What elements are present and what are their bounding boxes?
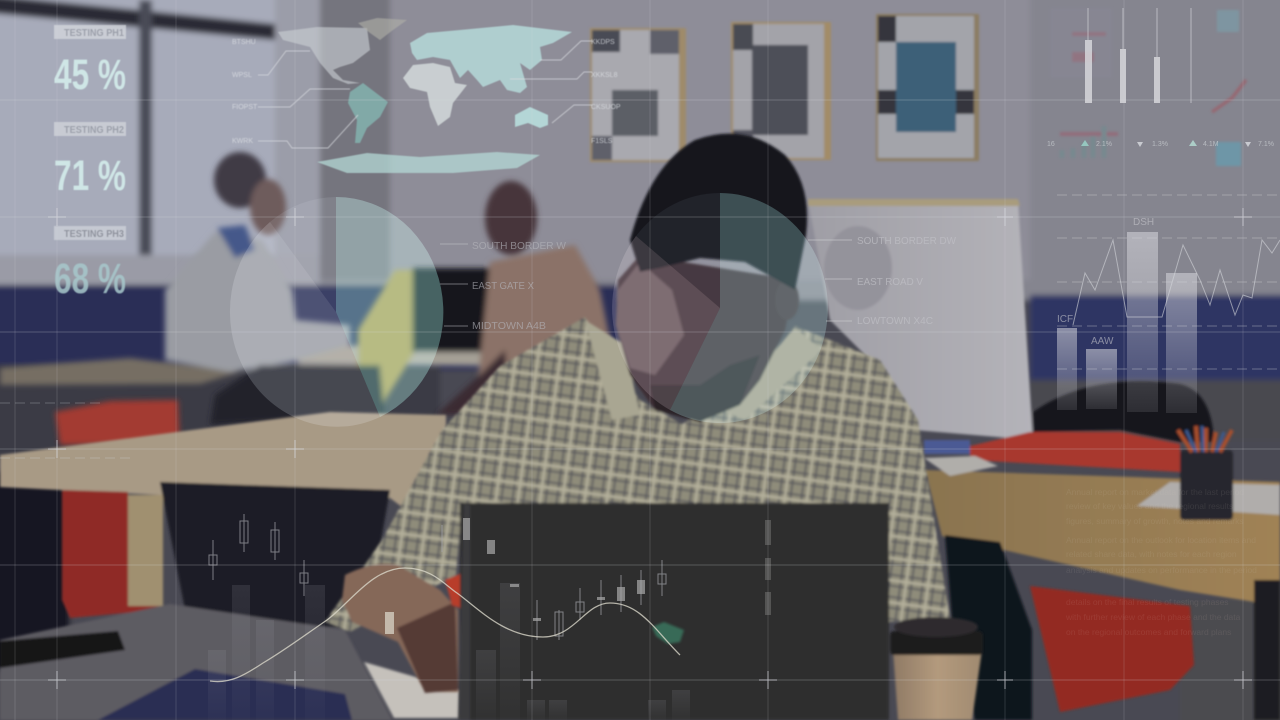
label: testing ph1 xyxy=(54,25,126,39)
eurasia xyxy=(410,25,572,93)
map labels: KWRK xyxy=(232,138,253,145)
right chart labels: SOUTH BORDER DW xyxy=(857,235,956,247)
black mesh chair xyxy=(160,482,390,628)
white notepad xyxy=(364,662,460,718)
bar labels: ICF xyxy=(1057,314,1073,325)
map labels: WPSL xyxy=(232,72,252,79)
left chart labels: EAST GATE X xyxy=(472,281,534,292)
faint volume bars xyxy=(208,583,690,720)
greenland xyxy=(358,18,407,40)
framed pictures on the wall xyxy=(590,14,979,162)
faint report text: related share data, with notes for each region xyxy=(1066,549,1237,559)
neck and face xyxy=(616,255,795,422)
pencil holder xyxy=(1178,426,1233,520)
left pale sector xyxy=(612,236,720,410)
stat: 45%: 45 % xyxy=(54,51,126,99)
collar xyxy=(585,320,640,420)
right red chair xyxy=(970,432,1180,472)
map labels: XKKSL8 xyxy=(591,72,618,79)
monitor xyxy=(808,200,1033,440)
south america xyxy=(348,83,388,143)
frame three xyxy=(876,14,979,161)
phone xyxy=(0,631,125,668)
faint report text: Annual report on the outlook for location items and xyxy=(1066,535,1256,545)
trend curve xyxy=(210,568,680,682)
line xyxy=(1073,240,1280,325)
right teal sector xyxy=(670,193,828,423)
africa xyxy=(403,63,467,126)
red chair left xyxy=(62,490,180,618)
north america xyxy=(278,27,370,84)
pie chart: left circle xyxy=(230,197,567,427)
faint report text: review of key values and the regional results xyxy=(1066,501,1233,511)
small column at grid line xyxy=(765,520,771,615)
indicators row: 1.3% xyxy=(1152,141,1168,148)
laptop back xyxy=(460,503,889,720)
dashed gridlines xyxy=(1057,195,1280,369)
small upper sector xyxy=(270,197,336,312)
frame two xyxy=(731,22,831,160)
bar labels: DSH xyxy=(1133,217,1154,228)
label: testing ph2 xyxy=(54,122,126,136)
faint report text xyxy=(1065,487,1257,637)
map labels: F1SLS xyxy=(591,138,613,145)
faint report text: Annual report on market data for the last period xyxy=(1066,487,1244,497)
indicators row: 7.1% xyxy=(1258,141,1274,148)
right chart labels: EAST ROAD V xyxy=(857,276,923,288)
right chart labels xyxy=(857,235,956,327)
right teal sector xyxy=(336,197,443,417)
frame one xyxy=(590,28,686,162)
candles outlined xyxy=(209,514,666,640)
faint report text: figures, summary of growth, notes and remarks xyxy=(1066,516,1244,526)
australia xyxy=(515,107,548,128)
top right bar widget xyxy=(1047,8,1274,166)
map labels xyxy=(232,39,621,145)
world map xyxy=(232,18,621,173)
forearm and hand xyxy=(342,564,458,692)
left chart labels xyxy=(472,241,567,332)
map labels: CKSUOP xyxy=(591,104,621,111)
paper on desk xyxy=(1137,482,1280,515)
man working at laptop xyxy=(325,134,983,720)
right chart labels: LOWTOWN X4C xyxy=(857,315,933,327)
right wooden table xyxy=(925,470,1280,606)
left chart labels: SOUTH BORDER W xyxy=(472,241,567,252)
label: testing ph3 xyxy=(54,226,126,240)
right bar and line chart xyxy=(1057,195,1280,413)
plaid shirt xyxy=(325,317,950,632)
small upper sector xyxy=(636,193,720,308)
map leader lines xyxy=(258,41,592,148)
stat: 68%: 68 % xyxy=(54,255,126,303)
dark chair back right xyxy=(1033,381,1214,442)
faint wall decor behind widget xyxy=(1050,8,1246,166)
red chair peek xyxy=(445,574,460,608)
map labels: KKDPS xyxy=(591,39,615,46)
indicators row: 2.1% xyxy=(1096,141,1112,148)
pie chart: right circle xyxy=(612,193,956,423)
label: testing ph2: TESTING PH2 xyxy=(64,124,124,136)
left pale sector xyxy=(230,222,380,427)
bottom left desk xyxy=(0,604,392,720)
right dark chair xyxy=(945,535,1032,720)
bar labels: AAW xyxy=(1091,336,1114,347)
navy notebook xyxy=(98,669,352,720)
bars xyxy=(1057,328,1077,410)
background colleagues and furniture xyxy=(0,152,610,445)
coffee cup xyxy=(890,617,983,720)
map labels: FIOPST xyxy=(232,104,258,111)
indicators row xyxy=(1047,140,1274,148)
foreground furniture xyxy=(0,199,1280,720)
bar labels xyxy=(1057,217,1154,347)
indicators row: 4.1M xyxy=(1203,141,1219,148)
label: testing ph1: TESTING PH1 xyxy=(64,27,124,39)
indicators row: 16 xyxy=(1047,141,1055,148)
hair xyxy=(630,134,807,290)
label: testing ph3: TESTING PH3 xyxy=(64,228,124,240)
faint report text: details on the final results of testing phases xyxy=(1066,597,1229,607)
antarctica xyxy=(317,152,540,173)
left chart labels: MIDTOWN A4B xyxy=(472,321,546,332)
candles filled xyxy=(385,518,645,634)
faint report text: with further review of each phase and the data xyxy=(1065,612,1241,622)
testing percentages panel xyxy=(54,25,126,303)
bars xyxy=(1085,40,1092,103)
map labels: BTSHU xyxy=(232,39,256,46)
stat: 71%: 71 % xyxy=(54,152,126,200)
faint report text: analysis and updates on performance in the period xyxy=(1066,565,1257,575)
large wooden table xyxy=(0,412,446,540)
candlestick chart and curve xyxy=(208,514,768,720)
faint report text: on the regional outcomes and forward plans xyxy=(1066,627,1231,637)
green leaf mark xyxy=(652,622,684,644)
